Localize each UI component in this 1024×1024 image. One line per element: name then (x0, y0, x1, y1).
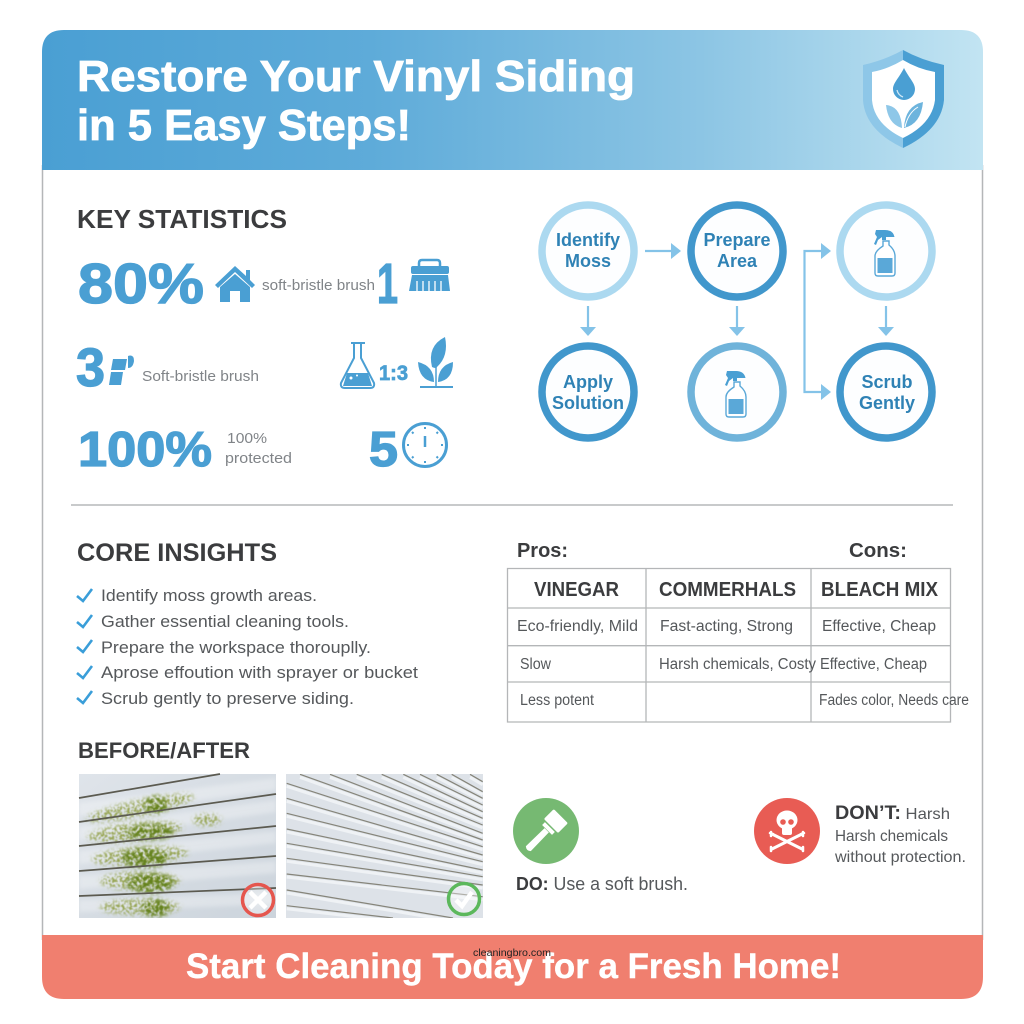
comparison table: Effective, Cheap (820, 656, 927, 673)
step: spray bottle medium (691, 346, 783, 438)
stat: 1:3: 1:3 (379, 362, 408, 385)
step: Identify Moss (542, 205, 634, 297)
don't tip (754, 798, 966, 866)
heading: key statistics: KEY STATISTICS (77, 204, 287, 234)
checklist: Gather essential cleaning tools. (101, 613, 349, 631)
stat label: soft-bristle brush: soft-bristle brush (262, 278, 375, 294)
flowchart (542, 205, 932, 438)
badge: green check (448, 884, 480, 914)
stat label: 100% protected (225, 431, 292, 467)
comparison table: BLEACH MIX (821, 579, 939, 601)
checklist: Prepare the workspace thorouplly. (101, 639, 371, 657)
step: Scrub Gently: Scrub (861, 372, 913, 392)
step: Scrub Gently: Gently (859, 393, 915, 413)
pros label: Pros: (517, 540, 568, 562)
footer call to action: Start Cleaning Today for a Fresh Home! (186, 947, 841, 986)
icon: skull and crossbones (754, 798, 820, 864)
heading: before/after: BEFORE/AFTER (78, 738, 250, 763)
step: Identify Moss: Moss (565, 251, 611, 271)
comparison table: Harsh chemicals, Costy (659, 656, 816, 673)
step: Prepare Area: Area (717, 251, 758, 271)
comparison table: Effective, Cheap (822, 618, 936, 635)
step: Apply Solution (542, 346, 634, 438)
stat: 3: 3 (76, 338, 105, 398)
checklist (77, 587, 418, 708)
step: Apply Solution: Apply (563, 372, 613, 392)
title: Restore Your Vinyl Siding (77, 52, 635, 101)
stat label: 100% protected: protected (225, 451, 292, 467)
comparison table (508, 568, 969, 722)
stat: 80%: 80% (78, 252, 204, 316)
title (77, 52, 635, 150)
step: spray bottle light (840, 205, 932, 297)
step: Scrub Gently (840, 346, 932, 438)
watermark: cleaningbro.com (473, 947, 551, 959)
comparison table: Fast-acting, Strong (660, 618, 793, 635)
stat: 5: 5 (369, 423, 398, 477)
heading: core insights: CORE INSIGHTS (77, 539, 277, 567)
comparison table: Less potent (520, 692, 595, 709)
footer banner (42, 935, 983, 999)
arrows (580, 243, 894, 400)
step: Identify Moss: Identify (556, 230, 620, 250)
icon: scrub brush (409, 260, 450, 291)
stat label: 100% protected: 100% (227, 431, 267, 447)
stat: 100%: 100% (78, 423, 212, 477)
do text: DO: Use a soft brush. (516, 874, 688, 894)
icon: flask (341, 343, 374, 388)
icon: shield with drop and leaves (863, 50, 944, 148)
photo: before, mossy siding (79, 774, 276, 918)
icon: green brush (513, 798, 579, 864)
icon: small sprayer (109, 356, 134, 385)
do tip (513, 798, 688, 894)
don't text: DON’T: Harsh (835, 803, 950, 824)
stat: 1: 1 (377, 252, 398, 316)
step: Prepare Area (691, 205, 783, 297)
comparison table: COMMERHALS (659, 579, 796, 601)
don't text: without protection. (834, 849, 966, 866)
cons label: Cons: (849, 540, 907, 562)
don't text: Harsh chemicals (835, 828, 948, 845)
icon: clock (404, 424, 446, 466)
icon: plant (418, 337, 453, 388)
title: in 5 Easy Steps! (77, 101, 411, 150)
step: Prepare Area: Prepare (703, 230, 771, 250)
comparison table: Eco-friendly, Mild (517, 618, 638, 635)
comparison table: Slow (520, 656, 552, 673)
checklist: Aprose effoution with sprayer or bucket (101, 664, 418, 682)
checklist: Identify moss growth areas. (101, 587, 317, 605)
card frame (42, 165, 982, 940)
don't text (834, 803, 966, 866)
icon: house (215, 266, 255, 302)
step: Apply Solution: Solution (552, 393, 624, 413)
checklist: Scrub gently to preserve siding. (101, 690, 354, 708)
header banner (42, 30, 983, 170)
comparison table: VINEGAR (534, 579, 620, 601)
stat label: Soft-bristle brush: Soft-bristle brush (142, 369, 259, 385)
comparison table: Fades color, Needs care (819, 692, 969, 709)
photo: after, clean siding (286, 774, 483, 921)
badge: red cross (242, 884, 274, 916)
